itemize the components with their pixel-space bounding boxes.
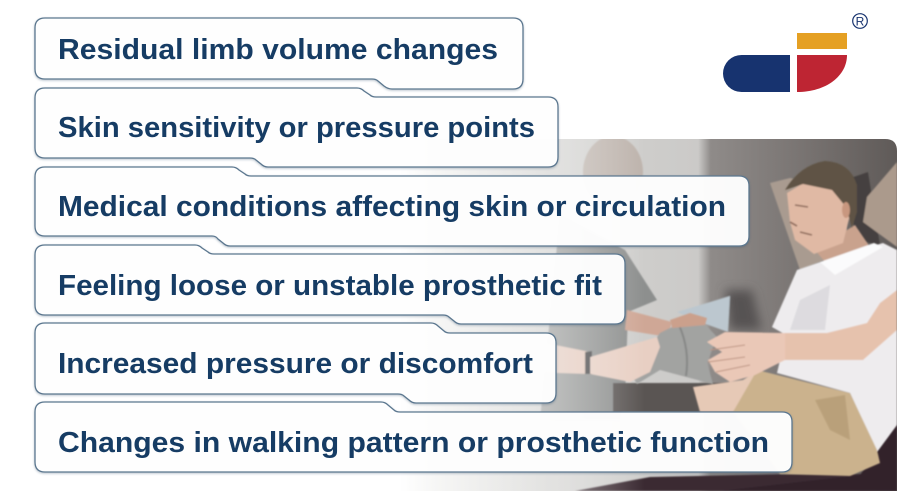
card: medical conditions: Medical conditions affecting skin or circulation bbox=[58, 191, 726, 223]
card: skin sensitivity or pressure points bbox=[35, 88, 558, 167]
bed and wall details bbox=[575, 290, 897, 491]
card: changes in walking pattern or prosthetic function: Changes in walking pattern or prosthetic function bbox=[58, 427, 769, 459]
neck and head bbox=[818, 224, 869, 262]
card: medical conditions bbox=[35, 167, 749, 246]
card: increased pressure or discomfort bbox=[35, 323, 556, 403]
logo bbox=[723, 14, 867, 92]
therapist hands bbox=[590, 337, 660, 382]
card: residual limb volume changes: Residual limb volume changes bbox=[58, 34, 498, 66]
knee brace bbox=[630, 322, 717, 384]
card: feeling loose or unstable prosthetic fit: Feeling loose or unstable prosthetic fit bbox=[58, 270, 603, 302]
card: skin sensitivity or pressure points: Skin sensitivity or pressure points bbox=[58, 112, 535, 144]
card: feeling loose or unstable prosthetic fit bbox=[35, 245, 625, 324]
patient figure bbox=[590, 161, 897, 476]
shirt bbox=[772, 243, 897, 452]
arm and hand bbox=[783, 290, 897, 360]
logo: red shape bbox=[797, 55, 847, 92]
facial features bbox=[790, 205, 812, 235]
therapist figure bbox=[540, 139, 724, 412]
card: residual limb volume changes bbox=[35, 18, 523, 89]
card: increased pressure or discomfort: Increased pressure or discomfort bbox=[58, 348, 534, 380]
pillows bbox=[770, 162, 897, 270]
background photo: patient and therapist bbox=[400, 136, 897, 491]
logo: registered mark: R bbox=[856, 14, 865, 28]
shorts bbox=[733, 370, 880, 476]
fade to white bbox=[400, 139, 645, 491]
logo: registered mark bbox=[853, 14, 867, 28]
card: changes in walking pattern or prosthetic function bbox=[35, 402, 792, 472]
leg bbox=[692, 375, 754, 412]
logo: gold bar bbox=[797, 33, 847, 49]
logo: blue pill bbox=[723, 55, 790, 92]
